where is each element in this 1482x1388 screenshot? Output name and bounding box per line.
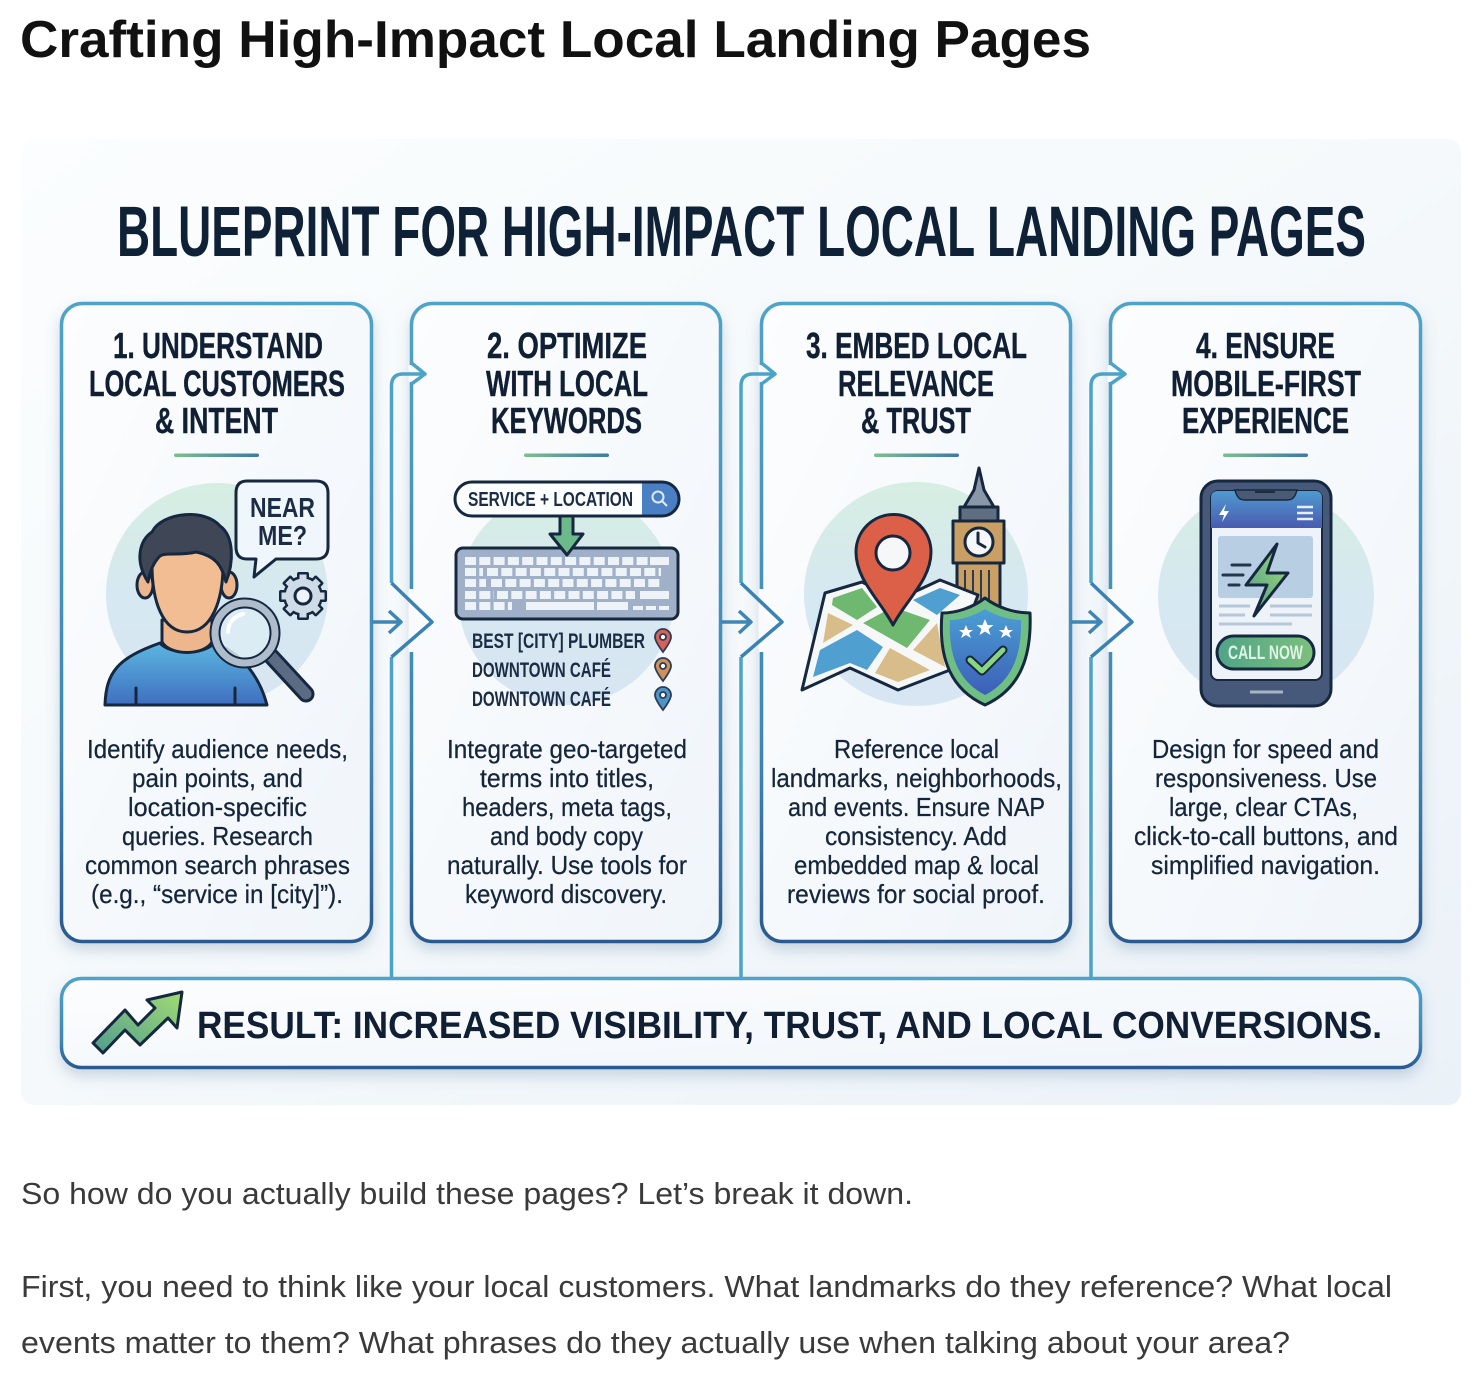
step 1 heading: LOCAL CUSTOMERS [89,363,345,404]
step 3 heading [806,325,1027,441]
map pin [856,514,931,625]
icon: rising trend arrow [93,992,182,1053]
result text: RESULT: INCREASED VISIBILITY, TRUST, AND LOCAL CONVERSIONS. [197,1005,1382,1047]
step 1 description: common search phrases [85,850,350,880]
step 3 heading: RELEVANCE [838,363,994,404]
step 3 description: reviews for social proof. [787,879,1045,909]
location pins [655,629,671,710]
speech bubble: ME? [258,520,307,551]
speech bubble: NEAR [250,492,315,523]
step 1 description: queries. Research [122,821,313,851]
panel: step 2 local keywords [412,304,720,942]
page title: Crafting High-Impact Local Landing Pages [20,11,1091,69]
keyboard [456,548,678,619]
step 4 description: Design for speed and [1152,734,1379,764]
step 4 heading: EXPERIENCE [1182,400,1349,441]
step 2 heading: WITH LOCAL [486,363,648,404]
step 2 description: terms into titles, [480,763,654,793]
icon: smartphone with call now button [1158,481,1374,706]
step 2 description: headers, meta tags, [462,792,672,822]
step 4 description: responsiveness. Use [1155,763,1377,793]
step 2 heading [486,325,648,441]
infographic panel [21,139,1461,1105]
step 4 description [1134,734,1398,880]
icon: person searching near me [105,481,328,705]
body paragraph 2: events matter to them? What phrases do they actually use when talking about your area? [21,1325,1290,1360]
step 3 description: and events. Ensure NAP [788,792,1045,822]
step 1 description: pain points, and [132,763,303,793]
step 2 description: and body copy [490,821,643,851]
keyword list: DOWNTOWN CAFÉ [472,688,611,711]
lightning bolt [1246,544,1288,616]
panel: step 1 understand customers [62,304,372,942]
step 4 heading: MOBILE-FIRST [1171,363,1361,404]
map [802,580,978,690]
step 3 heading: & TRUST [861,400,971,441]
step 1 heading: 1. UNDERSTAND [113,325,323,366]
connector arrow: step 3 to step 4 [1071,363,1132,977]
call now button: CALL NOW [1228,643,1303,664]
step 2 description: keyword discovery. [465,879,667,909]
icon: map, pin, clock tower and shield [802,468,1030,706]
step 1 heading [89,325,345,441]
body paragraph 2: First, you need to think like your local customers. What landmarks do they reference? What local [21,1269,1392,1304]
step 3 description: landmarks, neighborhoods, [771,763,1062,793]
icon: gear [279,572,327,620]
panel: step 4 mobile-first experience [1110,304,1420,942]
step 4 description: click-to-call buttons, and [1134,821,1398,851]
keyword list: BEST [CITY] PLUMBER [472,630,645,653]
body paragraph 2 [21,1269,1392,1360]
step 3 description: embedded map & local [794,850,1039,880]
search bar: SERVICE + LOCATION [468,489,633,511]
arrow down [550,516,583,555]
step 1 description: location-specific [128,792,307,822]
step 3 description: Reference local [834,734,999,764]
step 3 heading: 3. EMBED LOCAL [806,325,1027,366]
search bar [455,482,679,516]
step 4 description: large, clear CTAs, [1169,792,1358,822]
keyword list: DOWNTOWN CAFÉ [472,659,611,682]
panel: step 3 local relevance and trust [762,304,1070,942]
step 2 heading: 2. OPTIMIZE [487,325,647,366]
step 2 description [447,734,687,909]
step 2 heading: KEYWORDS [491,400,642,441]
step 1 description: Identify audience needs, [87,734,348,764]
result banner [62,978,1420,1068]
step 1 heading: & INTENT [155,400,278,441]
trust shield [941,598,1030,705]
step 4 description: simplified navigation. [1151,850,1380,880]
step 1 description [85,734,350,909]
step 3 description: consistency. Add [825,821,1007,851]
speech bubble [236,481,328,577]
call now button [1217,636,1314,669]
keyword list [472,630,645,711]
connector arrow: step 1 to step 2 [372,363,432,977]
step 4 heading [1171,325,1361,441]
step 4 heading: 4. ENSURE [1196,325,1335,366]
step 2 description: Integrate geo-targeted [447,734,687,764]
icon: search bar, keyboard and keyword list [455,482,679,711]
body paragraph 1: So how do you actually build these pages? Let’s break it down. [21,1176,913,1211]
connector arrow: step 2 to step 3 [721,363,782,977]
step 3 description [771,734,1062,909]
step 2 description: naturally. Use tools for [447,850,687,880]
clock tower [953,468,1004,608]
step 1 description: (e.g., “service in [city]”). [91,879,343,909]
